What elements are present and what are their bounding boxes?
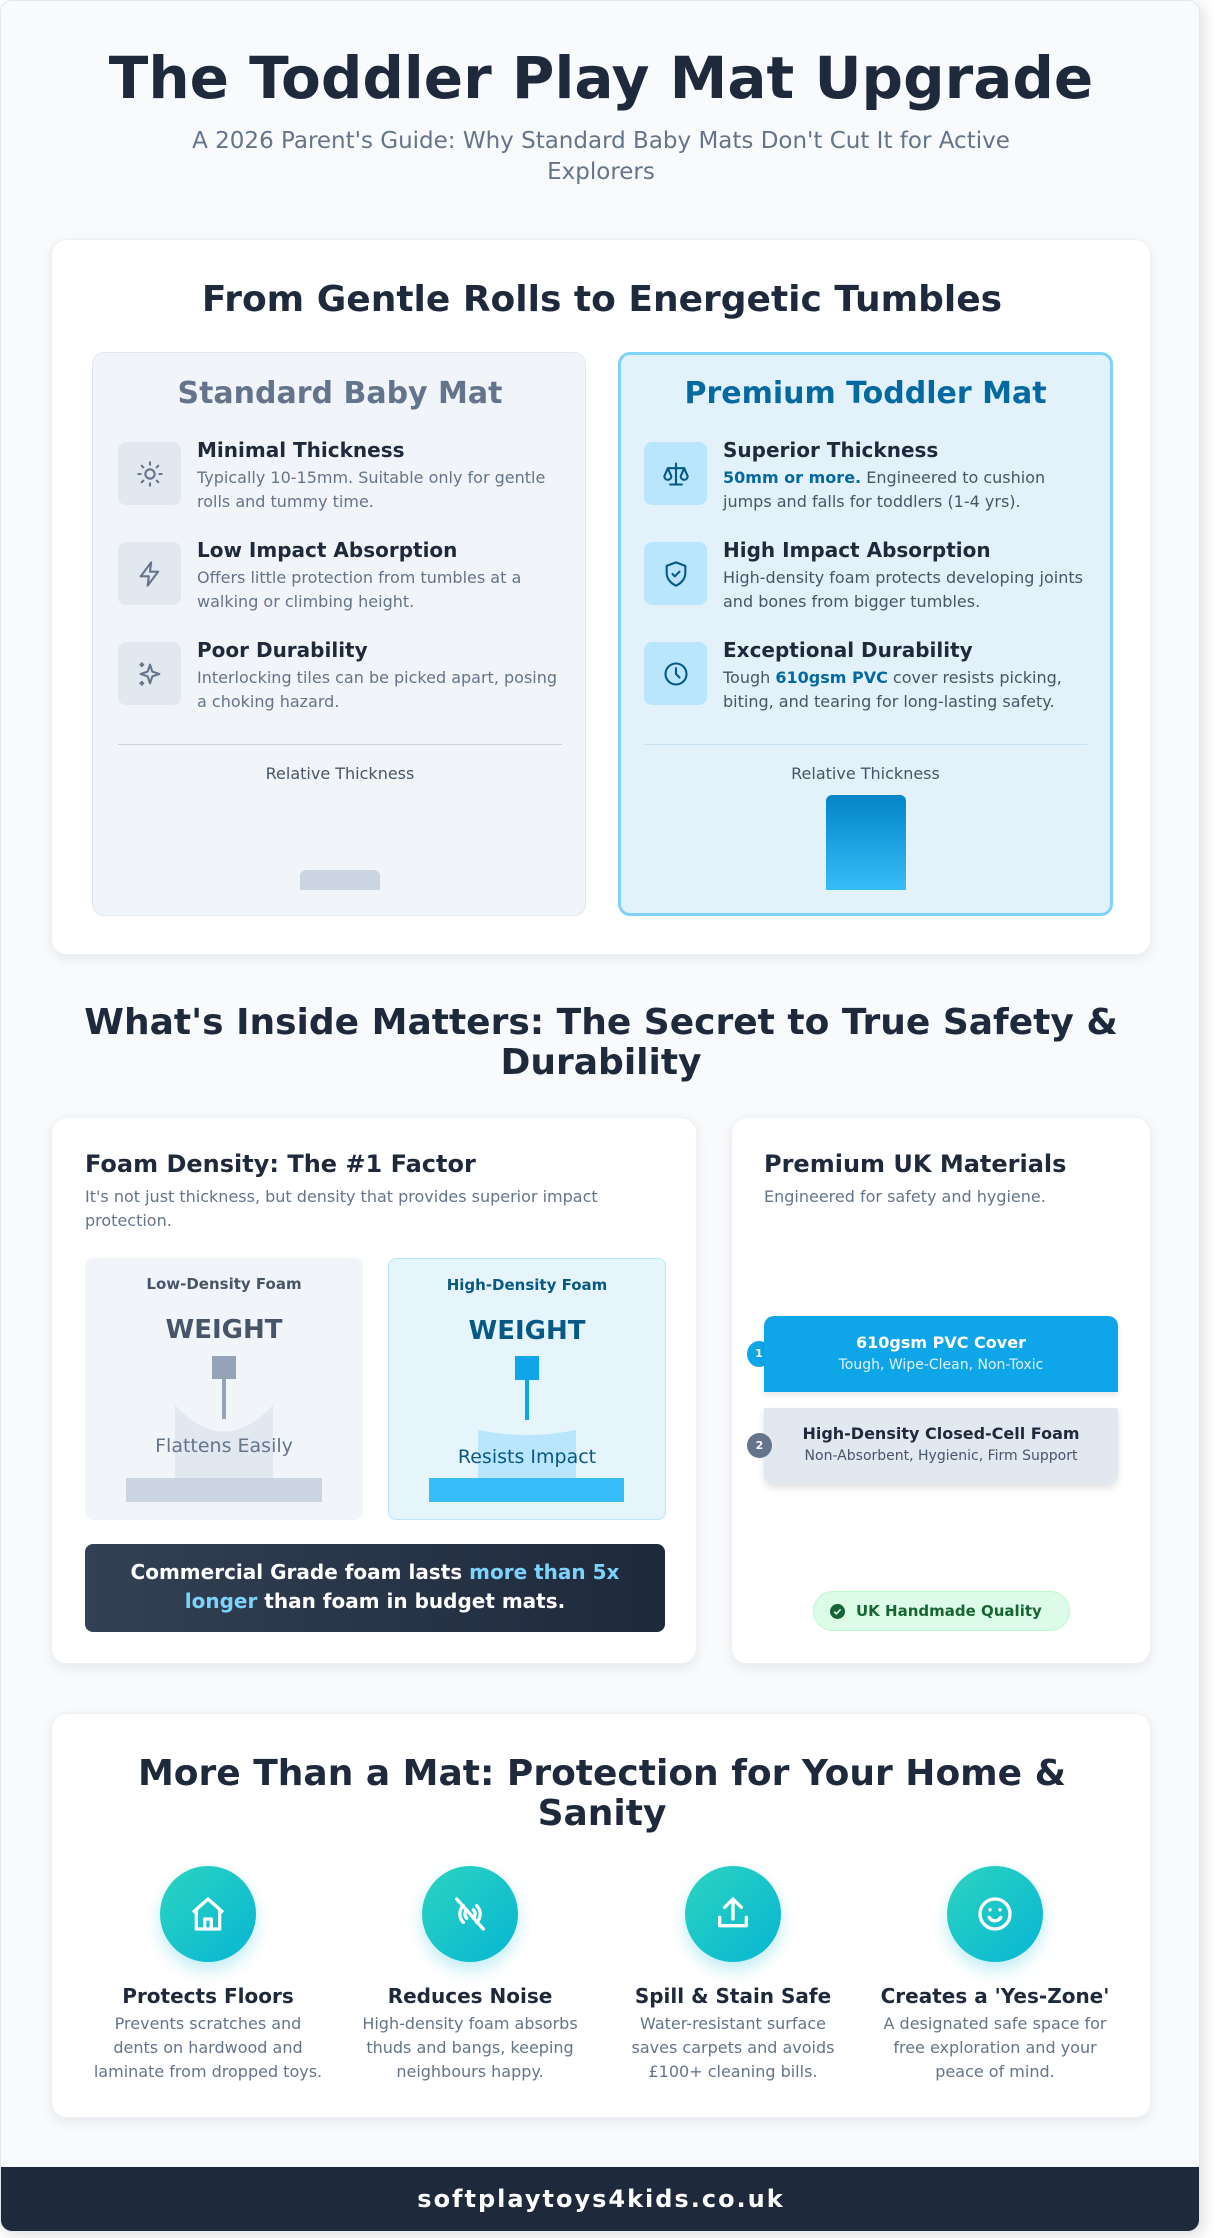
icon: shield: [644, 542, 707, 605]
heading: standard: Standard Baby Mat: [177, 376, 502, 411]
panel: foam density: [51, 1117, 697, 1664]
badge: 1: 1: [755, 1347, 763, 1360]
callout: commercial grade: Commercial Grade foam lasts more than 5x longer than foam in budget mats.: [131, 1560, 619, 1613]
item: poor durability: Interlocking tiles can be picked apart, posing a choking hazard.: [197, 668, 557, 711]
feature: yes-zone: [881, 1866, 1109, 2081]
badge: UK handmade quality: UK Handmade Quality: [856, 1602, 1042, 1620]
diagram: high density: Resists Impact: [458, 1446, 596, 1468]
badge: UK handmade quality: [813, 1591, 1070, 1631]
diagram: low density: Low-Density Foam: [146, 1275, 302, 1293]
feature: yes-zone: A designated safe space for free exploration and your peace of mind.: [884, 2014, 1106, 2081]
icon: upload: [685, 1866, 781, 1962]
icon: clock: [644, 642, 707, 705]
heading: comparison: From Gentle Rolls to Energetic Tumbles: [202, 279, 1002, 320]
diagram: low density: WEIGHT: [166, 1315, 282, 1345]
subtitle: A 2026 Parent's Guide: Why Standard Baby Mats Don't Cut It for Active Explorers: [192, 128, 1010, 185]
text: materials desc: Engineered for safety and hygiene.: [764, 1187, 1046, 1206]
feature: reduces noise: High-density foam absorbs thuds and bangs, keeping neighbours happy.: [362, 2014, 578, 2081]
label: relative thickness: Relative Thickness: [266, 764, 414, 783]
heading: foam density: Foam Density: The #1 Factor: [85, 1150, 476, 1178]
feature: protects floors: Prevents scratches and dents on hardwood and laminate from dropped toys.: [94, 2014, 322, 2081]
diagram: high density: WEIGHT: [469, 1316, 585, 1346]
panel: premium toddler mat: [618, 352, 1113, 916]
icon: smile: [947, 1866, 1043, 1962]
label: relative thickness: Relative Thickness: [791, 764, 940, 783]
heading: premium: Premium Toddler Mat: [684, 376, 1047, 411]
feature: spill safe: Spill & Stain Safe: [635, 1984, 831, 2008]
item: superior thickness: Superior Thickness: [723, 438, 938, 462]
feature: spill safe: [632, 1866, 834, 2081]
item: poor durability: Poor Durability: [197, 638, 368, 662]
item: exceptional durability: Exceptional Durability: [723, 638, 973, 662]
item: high impact: High Impact Absorption: [723, 538, 991, 562]
item: exceptional durability: [644, 638, 1062, 711]
heading: what's inside: What's Inside Matters: The Secret to True Safety & Durability: [84, 1002, 1118, 1083]
icon: house: [160, 1866, 256, 1962]
layer: PVC cover: [764, 1316, 1118, 1392]
footer: [1, 2167, 1201, 2233]
icon: bolt: [118, 542, 181, 605]
icon: scales: [644, 442, 707, 505]
layer: foam: [764, 1408, 1118, 1484]
item: exceptional durability: Tough 610gsm PVC cover resists picking, biting, and tearing for long-lasting safety.: [723, 668, 1062, 711]
icon: sparkle: [118, 642, 181, 705]
item: minimal thickness: Typically 10-15mm. Suitable only for gentle rolls and tummy time.: [197, 468, 545, 511]
item: minimal thickness: Minimal Thickness: [197, 438, 405, 462]
layer: foam: Non-Absorbent, Hygienic, Firm Support: [805, 1448, 1077, 1464]
feature: protects floors: Protects Floors: [122, 1984, 294, 2008]
panel: more than a mat: [51, 1713, 1151, 2118]
item: superior thickness: [644, 438, 1045, 511]
bar: thin: [300, 870, 380, 890]
panel: premium UK materials: [731, 1117, 1151, 1664]
diagram: high density: High-Density Foam: [447, 1276, 607, 1294]
layer: foam: High-Density Closed-Cell Foam: [802, 1424, 1080, 1443]
text: foam desc: It's not just thickness, but density that provides superior impact protection.: [85, 1187, 598, 1230]
badge: 2: [747, 1433, 772, 1458]
item: low impact: Low Impact Absorption: [197, 538, 457, 562]
heading: materials: Premium UK Materials: [764, 1150, 1066, 1178]
icon: sun: [118, 442, 181, 505]
feature: protects floors: [94, 1866, 322, 2081]
layer: PVC cover: Tough, Wipe-Clean, Non-Toxic: [839, 1357, 1043, 1373]
item: low impact: Offers little protection from tumbles at a walking or climbing height.: [197, 568, 521, 611]
panel: standard baby mat: [92, 352, 586, 916]
feature: spill safe: Water-resistant surface saves carpets and avoids £100+ cleaning bills.: [632, 2014, 834, 2081]
layer: PVC cover: 610gsm PVC Cover: [856, 1333, 1026, 1352]
callout: commercial grade: [85, 1544, 665, 1632]
feature: reduces noise: Reduces Noise: [388, 1984, 552, 2008]
title: The Toddler Play Mat Upgrade: [109, 44, 1093, 112]
item: high impact: High-density foam protects developing joints and bones from bigger tumbles.: [723, 568, 1083, 611]
diagram: low density: Flattens Easily: [155, 1435, 293, 1457]
item: superior thickness: 50mm or more. Engineered to cushion jumps and falls for toddlers (1-4 yrs).: [723, 468, 1045, 511]
feature: reduces noise: [362, 1866, 578, 2081]
panel: comparison: [51, 239, 1151, 955]
item: high impact: [644, 538, 1083, 611]
heading: more than a mat: More Than a Mat: Protection for Your Home & Sanity: [138, 1753, 1066, 1834]
item: poor durability: [118, 638, 557, 711]
badge: 2: 2: [756, 1439, 763, 1452]
icon: no sound: [422, 1866, 518, 1962]
item: low impact: [118, 538, 521, 611]
feature: yes-zone: Creates a 'Yes-Zone': [881, 1984, 1109, 2008]
diagram: low density: [85, 1258, 363, 1520]
footer: softplaytoys4kids.co.uk: [417, 2185, 785, 2213]
diagram: high density: [388, 1258, 666, 1520]
item: minimal thickness: [118, 438, 545, 511]
bar: thick: [826, 795, 906, 890]
badge: 1: [747, 1341, 771, 1367]
